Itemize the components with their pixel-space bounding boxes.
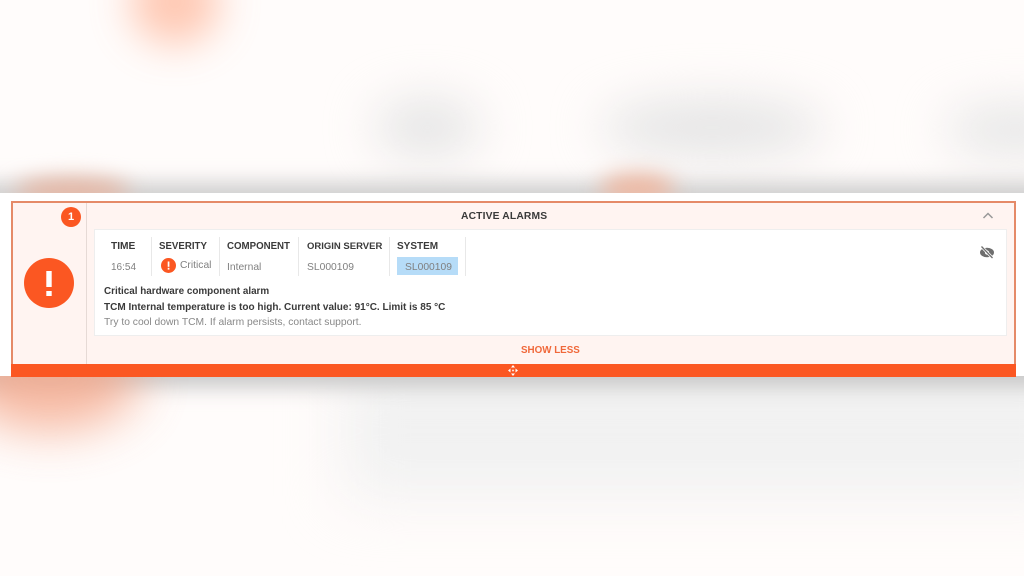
table: component column: COMPONENT <box>227 241 290 252</box>
icon: move handle <box>508 365 518 376</box>
table: time column <box>111 241 136 273</box>
heading: active alarms: ACTIVE ALARMS <box>461 211 547 222</box>
text: alarm message: TCM Internal temperature is too high. Current value: 91°C. Limit is 85 °C <box>104 302 445 313</box>
table: system column: SL000109 <box>405 262 452 273</box>
icon: hidden eye <box>980 246 994 258</box>
table: origin server column: ORIGIN SERVER <box>307 241 382 252</box>
table: origin server column <box>307 241 382 273</box>
table: system column <box>397 241 458 275</box>
table: system column: SYSTEM <box>397 241 438 252</box>
table: component column <box>227 241 290 273</box>
text: alarm title: Critical hardware component alarm <box>104 286 269 297</box>
badge: alarm count <box>61 207 81 227</box>
white strip behind alarm panel <box>0 193 1024 376</box>
table: severity column: Critical <box>180 260 211 271</box>
badge: alarm count: 1 <box>68 211 74 223</box>
text: alarm advice: Try to cool down TCM. If alarm persists, contact support. <box>104 317 362 328</box>
blurred background: top <box>0 0 1024 193</box>
blurred background: bottom <box>0 376 1024 490</box>
panel: active alarms <box>11 201 1016 376</box>
table: origin server column: SL000109 <box>307 262 354 273</box>
table: component column: Internal <box>227 262 261 273</box>
panel: alarm details <box>94 229 1007 336</box>
button: show less: SHOW LESS <box>521 345 580 356</box>
drag bar <box>11 364 1016 376</box>
table: severity column <box>159 241 211 273</box>
left column divider <box>86 203 87 364</box>
icon: large alarm <box>24 258 74 308</box>
table: severity column: SEVERITY <box>159 241 207 252</box>
table: time column: 16:54 <box>111 262 136 273</box>
icon: collapse chevron <box>983 212 993 218</box>
table: time column: TIME <box>111 241 135 252</box>
